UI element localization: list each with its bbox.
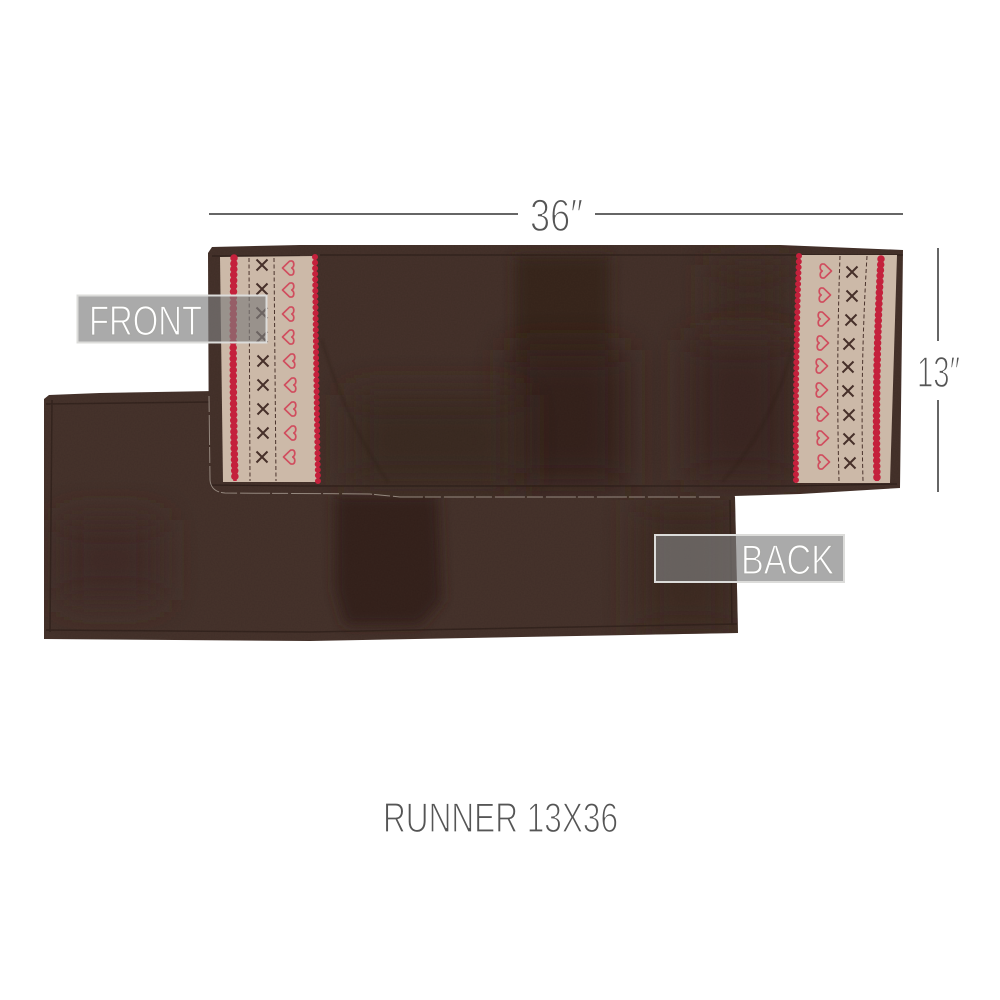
heart stitches: [282, 261, 296, 464]
panel: left embroidered band: [220, 256, 319, 482]
dashed stitching: [838, 256, 867, 481]
dimension: height 13 inches: 13″: [917, 348, 960, 397]
panel: right embroidered band: [795, 255, 897, 483]
panel: front of runner: [205, 240, 910, 502]
white stitching edge: [209, 396, 720, 497]
cross stitches: [842, 266, 858, 468]
label: front: FRONT: [89, 297, 202, 344]
cross stitches: [256, 260, 268, 462]
trim: outer red: [876, 259, 881, 481]
label: back: [655, 535, 844, 583]
dashed stitching: [249, 258, 276, 481]
trim: outer red: [233, 258, 235, 481]
label: back: BACK: [741, 536, 834, 583]
heart stitches: [816, 264, 832, 469]
trim: inner red: [796, 256, 799, 482]
dimension: width 36 inches: 36″: [530, 190, 583, 241]
product size infographic: [44, 200, 959, 832]
trim: inner red: [315, 257, 318, 481]
caption: RUNNER 13X36: [383, 794, 618, 841]
panel: back of runner: [40, 388, 745, 646]
